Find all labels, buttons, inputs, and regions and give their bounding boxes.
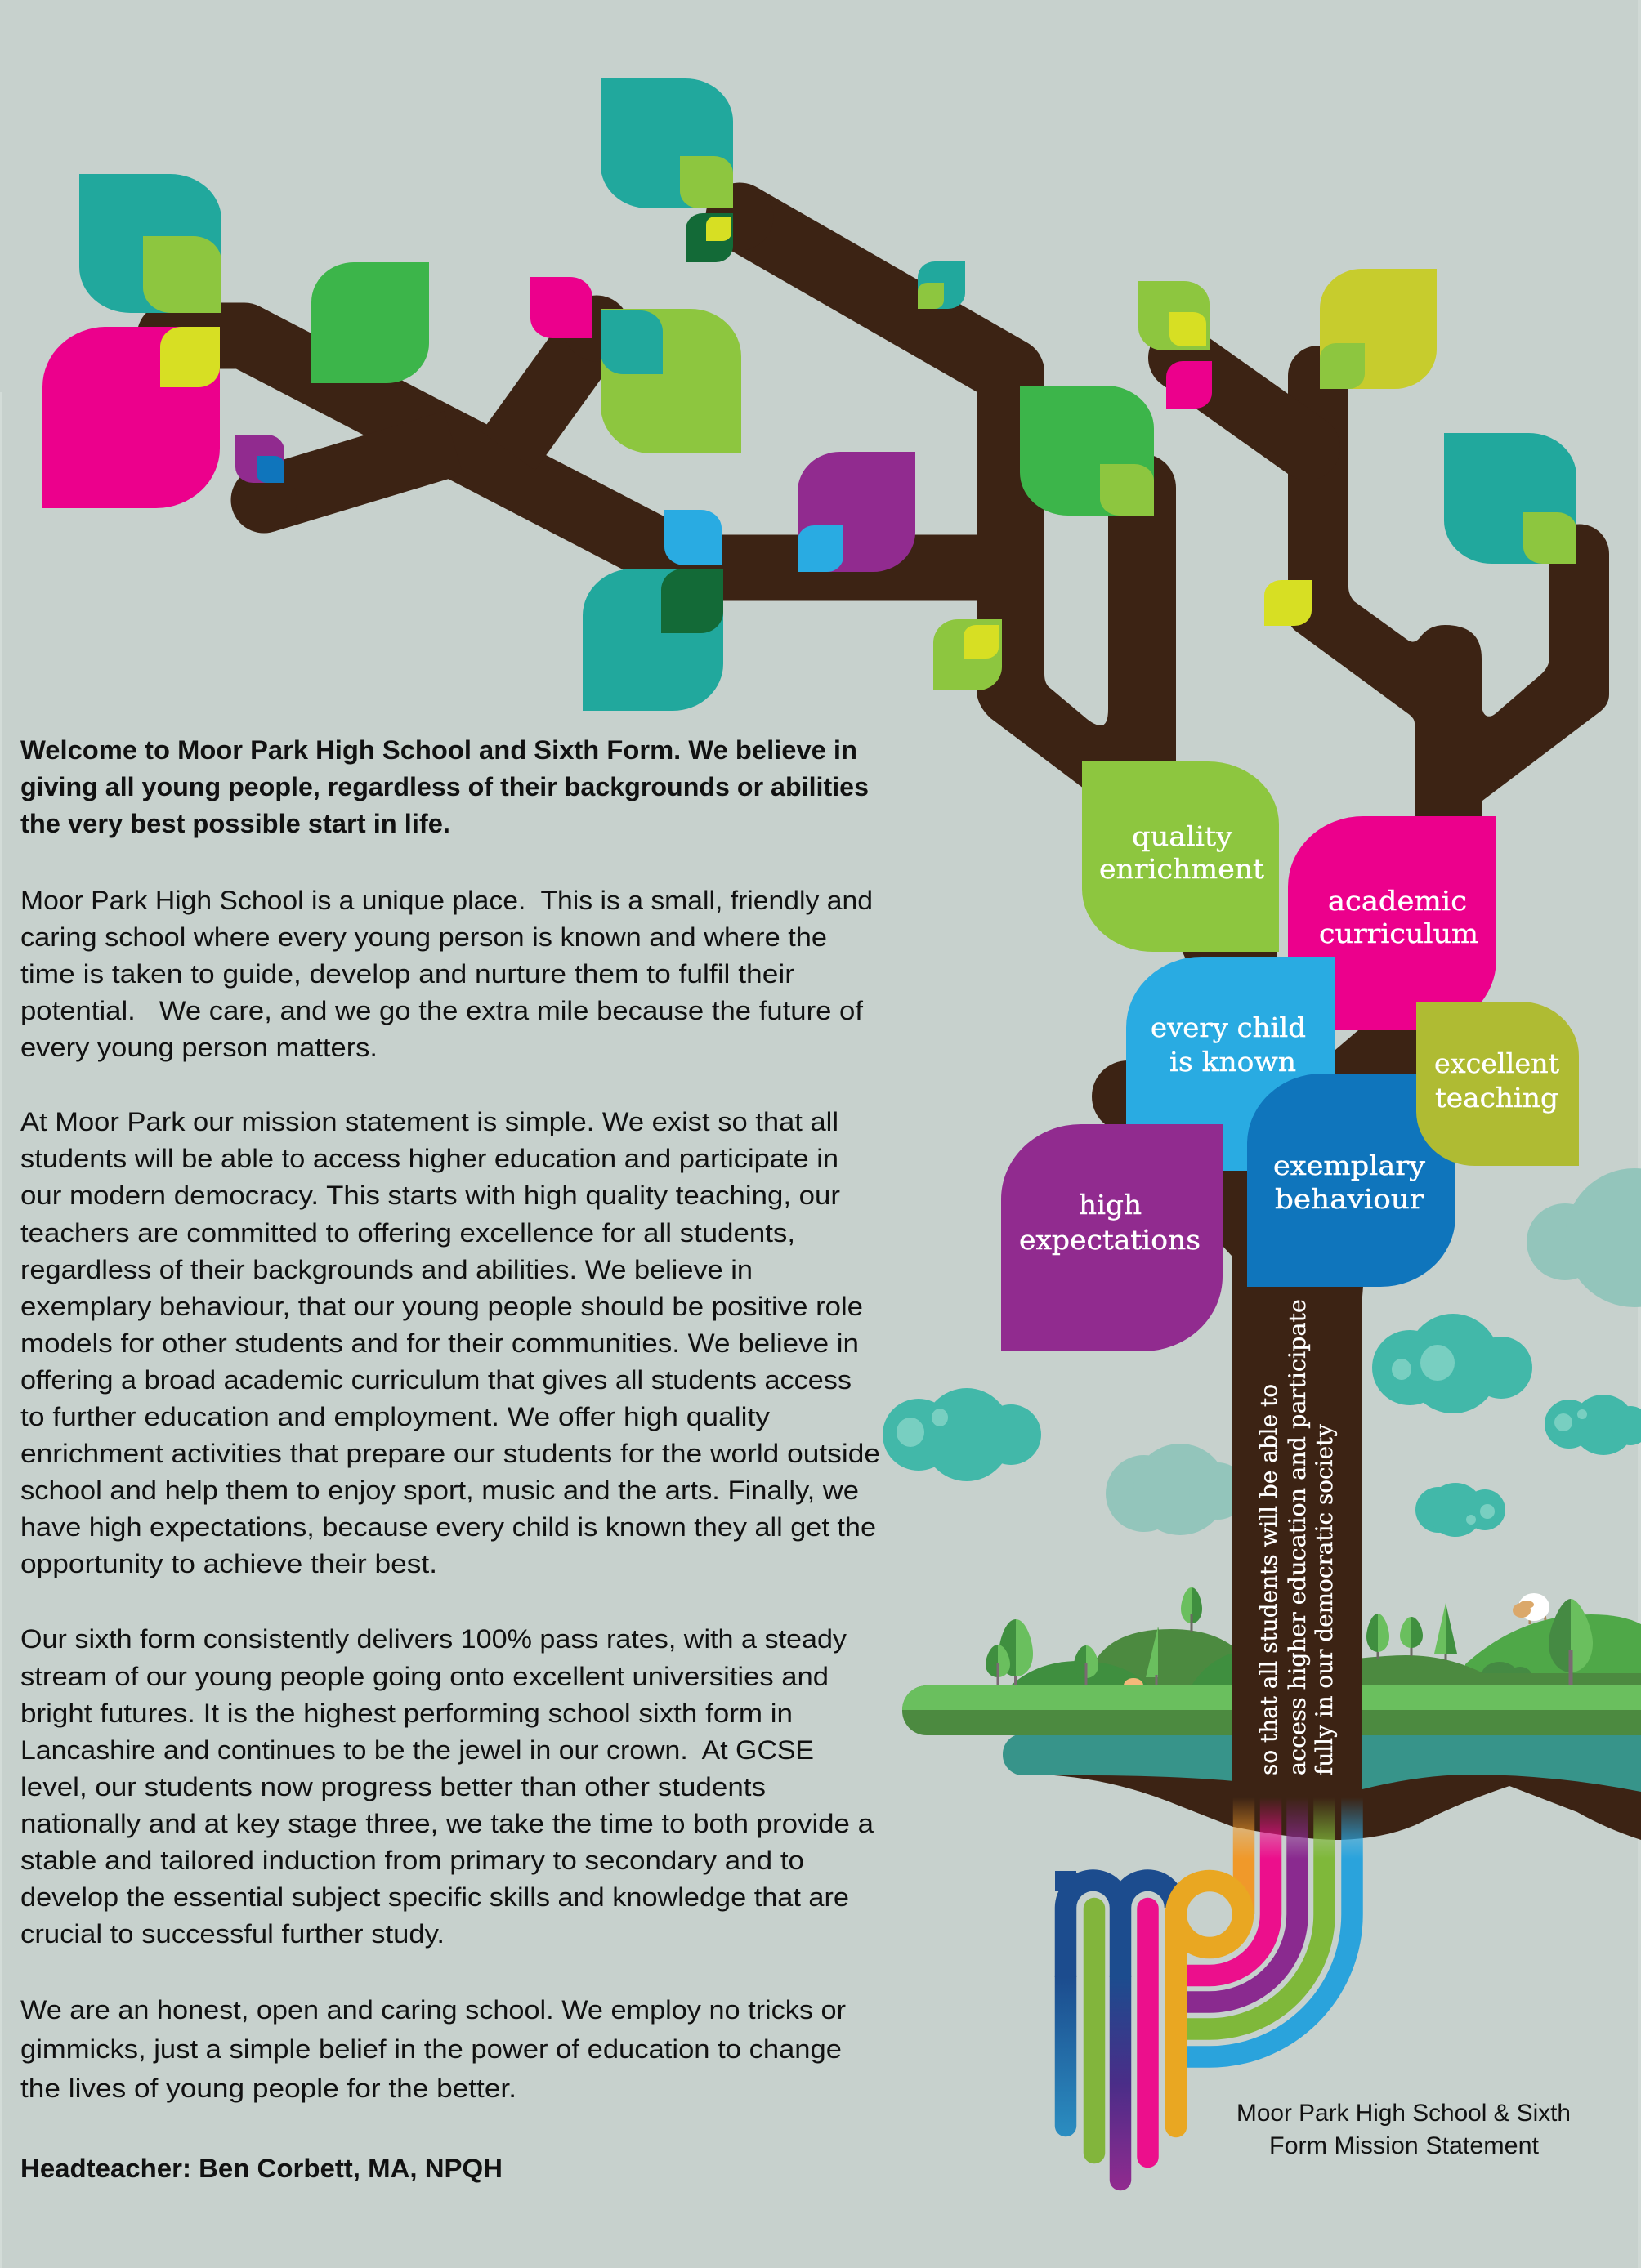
ground: brown soil — [1054, 1775, 1641, 1840]
panel: academic curriculum leaf — [1288, 816, 1496, 1030]
cloud: upper teal — [1372, 1314, 1532, 1413]
tree branches right — [1181, 346, 1609, 825]
text block: sixth form paragraph: Lancashire and continues to be the jewel in our crown. At GCSE — [20, 1735, 814, 1765]
text block: sixth form paragraph: stream of our young people going onto excellent universities and — [20, 1662, 829, 1691]
text block: honest school paragraph — [20, 1995, 846, 2103]
text block: welcome intro: giving all young people, regardless of their backgrounds or abilities — [20, 772, 869, 801]
leaf: light green lower — [933, 619, 1002, 690]
text block: mission paragraph: regardless of their backgrounds and abilities. We believe in — [20, 1255, 753, 1284]
leaf: light green small on branch — [918, 283, 944, 309]
leaf: yellow right — [1169, 312, 1206, 346]
ground: green grass bands — [902, 1685, 1641, 1735]
panel: academic curriculum leaf: academic — [1328, 885, 1467, 917]
leaf: teal upper left — [79, 174, 221, 313]
text block: mission paragraph — [20, 1107, 880, 1578]
panel: every child is known leaf — [1126, 957, 1335, 1171]
cloud: small teal — [1415, 1483, 1505, 1537]
text block: unique place paragraph: caring school where every young person is known and where the — [20, 922, 827, 952]
leaf: light green right — [1138, 281, 1210, 350]
text block: unique place paragraph: potential. We care, and we go the extra mile because the future of — [20, 996, 864, 1025]
text block: mission paragraph: offering a broad academic curriculum that gives all students access — [20, 1365, 852, 1395]
leaf: light green large — [601, 309, 741, 453]
text block: sixth form paragraph: develop the essential subject specific skills and knowledge that are — [20, 1882, 849, 1912]
leaf: teal small on branch — [918, 261, 965, 309]
trunk text: mission statement — [1255, 1299, 1338, 1775]
leaf: blue on purple — [798, 525, 843, 572]
leaf: light green on green — [1100, 464, 1154, 516]
leaf: pink small — [530, 277, 592, 338]
leaf: purple — [798, 452, 915, 572]
leaf: yellow lower — [964, 625, 999, 659]
text block: mission paragraph: our modern democracy. This starts with high quality teaching, our — [20, 1181, 840, 1210]
text block: unique place paragraph: Moor Park High School is a unique place. This is a small, friendly and — [20, 886, 873, 915]
leaf: purple small — [235, 435, 284, 483]
text block: welcome intro: Welcome to Moor Park High School and Sixth Form. We believe in — [20, 735, 857, 765]
panel: every child is known leaf: is known — [1169, 1046, 1296, 1078]
text block: mission paragraph: to further education and employment. We offer high quality — [20, 1402, 771, 1431]
text block: mission paragraph: opportunity to achieve their best. — [20, 1549, 437, 1578]
leaf: light green on teal right — [1523, 512, 1576, 564]
leaf: teal bottom — [583, 569, 723, 711]
tree branches left — [137, 183, 1010, 654]
cloud: right teal — [1545, 1395, 1641, 1455]
text block: honest school paragraph: gimmicks, just a simple belief in the power of education to change — [20, 2034, 842, 2064]
logo: letter p — [1176, 1881, 1243, 2127]
icon: sheep — [1513, 1593, 1549, 1624]
text block: mission paragraph: students will be able to access higher education and participate in — [20, 1144, 838, 1173]
panel: exemplary behaviour leaf: exemplary — [1273, 1150, 1425, 1181]
logo: letter m — [1055, 1871, 1175, 2180]
panel: academic curriculum leaf: curriculum — [1319, 917, 1478, 949]
leaf: yellow small right — [1264, 580, 1312, 626]
text block: mission paragraph: exemplary behaviour, that our young people should be positive role — [20, 1292, 863, 1321]
panel: every child is known leaf: every child — [1151, 1011, 1306, 1043]
caption: logo mission statement — [1236, 2100, 1571, 2159]
tree branches middle — [977, 454, 1176, 791]
cloud: pale centre — [1106, 1444, 1246, 1535]
hills and trees right of trunk — [1357, 1599, 1641, 1688]
leaf: green large — [1020, 386, 1154, 516]
logo: coloured stripes — [1185, 1797, 1352, 2057]
cloud: left teal — [883, 1388, 1041, 1481]
text block: sixth form paragraph: stable and tailored induction from primary to secondary and to — [20, 1846, 804, 1875]
leaf: sky blue — [664, 510, 722, 565]
panel: quality enrichment leaf: enrichment — [1099, 853, 1264, 885]
text block: sixth form paragraph: level, our students now progress better than other students — [20, 1772, 766, 1801]
hills and trees left of trunk — [986, 1587, 1242, 1693]
text block: mission paragraph: school and help them to enjoy sport, music and the arts. Finally, we — [20, 1476, 859, 1505]
leaf: pink large — [42, 327, 220, 508]
text block: sixth form paragraph: nationally and at key stage three, we take the time to both provide a — [20, 1809, 874, 1838]
leaf: yellow top — [706, 217, 731, 241]
panel: exemplary behaviour leaf: behaviour — [1275, 1183, 1424, 1215]
panel: excellent teaching leaf: teaching — [1435, 1082, 1558, 1114]
text block: mission paragraph: models for other students and for their communities. We believe in — [20, 1328, 859, 1358]
trunk text: mission statement: so that all students will be able to — [1255, 1384, 1282, 1775]
trunk text: mission statement: access higher education and participate — [1284, 1299, 1311, 1775]
leaf: blue small — [257, 456, 284, 483]
text block: honest school paragraph: We are an honest, open and caring school. We employ no tricks or — [20, 1995, 846, 2025]
text block: headteacher signature: Headteacher: Ben Corbett, MA, NPQH — [20, 2154, 503, 2183]
text block: sixth form paragraph: crucial to successful further study. — [20, 1919, 445, 1949]
text block: welcome intro — [20, 735, 869, 838]
panel: excellent teaching leaf: excellent — [1434, 1047, 1559, 1079]
leaf: teal right — [1444, 433, 1576, 564]
text block: mission paragraph: At Moor Park our mission statement is simple. We exist so that all — [20, 1107, 838, 1136]
text block: mission paragraph: teachers are committed to offering excellence for all students, — [20, 1218, 795, 1248]
text block: mission paragraph: enrichment activities that prepare our students for the world outside — [20, 1439, 880, 1468]
ground: teal water band — [1003, 1734, 1641, 1793]
text block: mission paragraph: have high expectations, because every child is known they all get the — [20, 1512, 876, 1542]
text block: unique place paragraph: time is taken to guide, develop and nurture them to fulfil their — [20, 959, 794, 989]
caption: logo mission statement: Form Mission Statement — [1269, 2132, 1540, 2159]
caption: logo mission statement: Moor Park High School & Sixth — [1236, 2100, 1571, 2127]
text block: sixth form paragraph — [20, 1624, 874, 1949]
leaf: light green on olive — [1320, 343, 1365, 389]
leaf: pink right — [1166, 361, 1212, 409]
panel: quality enrichment leaf — [1082, 761, 1279, 952]
leaf: teal on light green — [601, 310, 663, 374]
leaf: olive — [1320, 269, 1437, 389]
text block: welcome intro: the very best possible start in life. — [20, 809, 450, 838]
panel: quality enrichment leaf: quality — [1132, 820, 1232, 852]
tree trunk — [1223, 1160, 1373, 1789]
text block: honest school paragraph: the lives of young people for the better. — [20, 2074, 516, 2103]
panel: high expectations leaf: expectations — [1019, 1224, 1201, 1256]
leaf: yellow on pink — [160, 327, 220, 387]
trunk text: mission statement: fully in our democratic society — [1311, 1424, 1338, 1775]
cloud: pale top right — [1527, 1168, 1641, 1307]
leaf: teal top — [601, 78, 733, 208]
text block: sixth form paragraph: Our sixth form consistently delivers 100% pass rates, with a steady — [20, 1624, 847, 1654]
panel: high expectations leaf: high — [1079, 1189, 1142, 1221]
leaf: light green top — [680, 156, 733, 208]
leaf: dark green top — [686, 213, 733, 262]
panel: excellent teaching leaf — [1416, 1002, 1579, 1166]
text block: sixth form paragraph: bright futures. It is the highest performing school sixth form in — [20, 1699, 793, 1728]
leaf: green — [311, 262, 429, 383]
panel: exemplary behaviour leaf — [1247, 1074, 1455, 1287]
leaf: dark green bottom — [661, 569, 723, 633]
text block: unique place paragraph — [20, 886, 873, 1062]
panel: high expectations leaf — [1001, 1124, 1223, 1351]
tree connectors behind leaves — [1092, 817, 1482, 1132]
text block: unique place paragraph: every young person matters. — [20, 1033, 378, 1062]
leaf: light green upper left — [143, 236, 221, 313]
